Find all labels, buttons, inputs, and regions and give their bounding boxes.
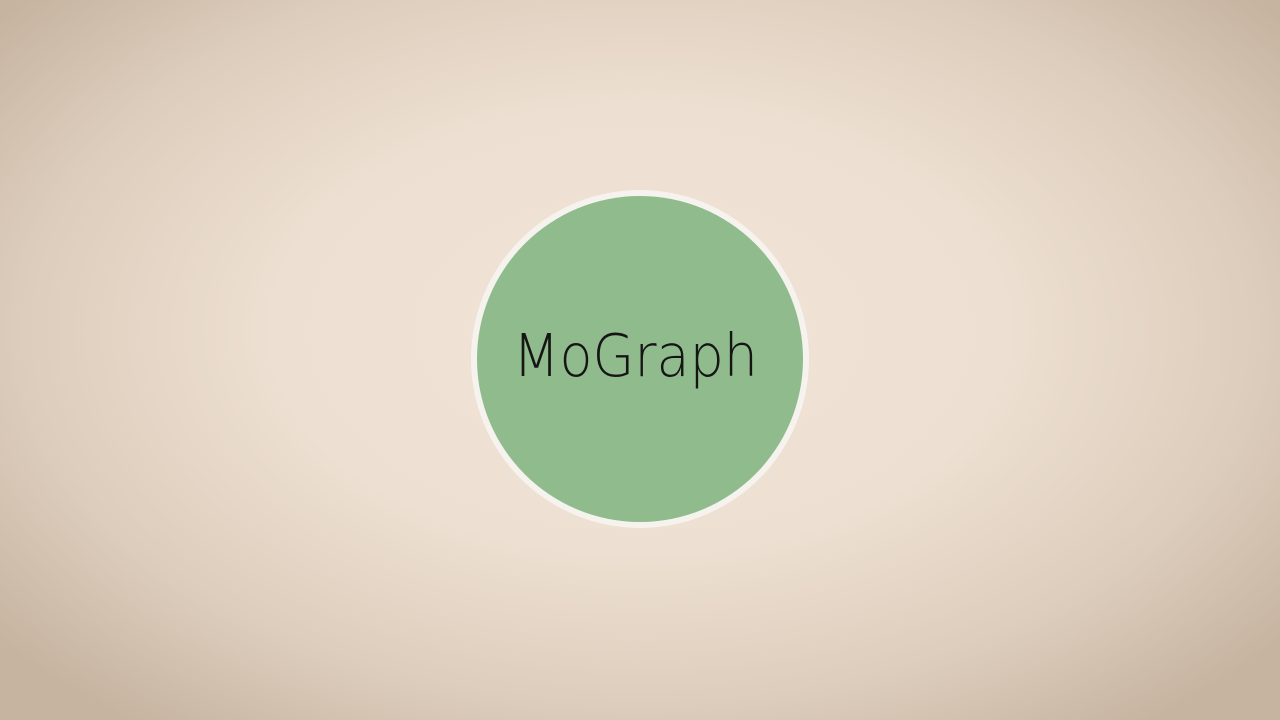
title: MoGraph [513,321,758,390]
panel: green circle [471,190,809,528]
circle fill [477,196,803,522]
